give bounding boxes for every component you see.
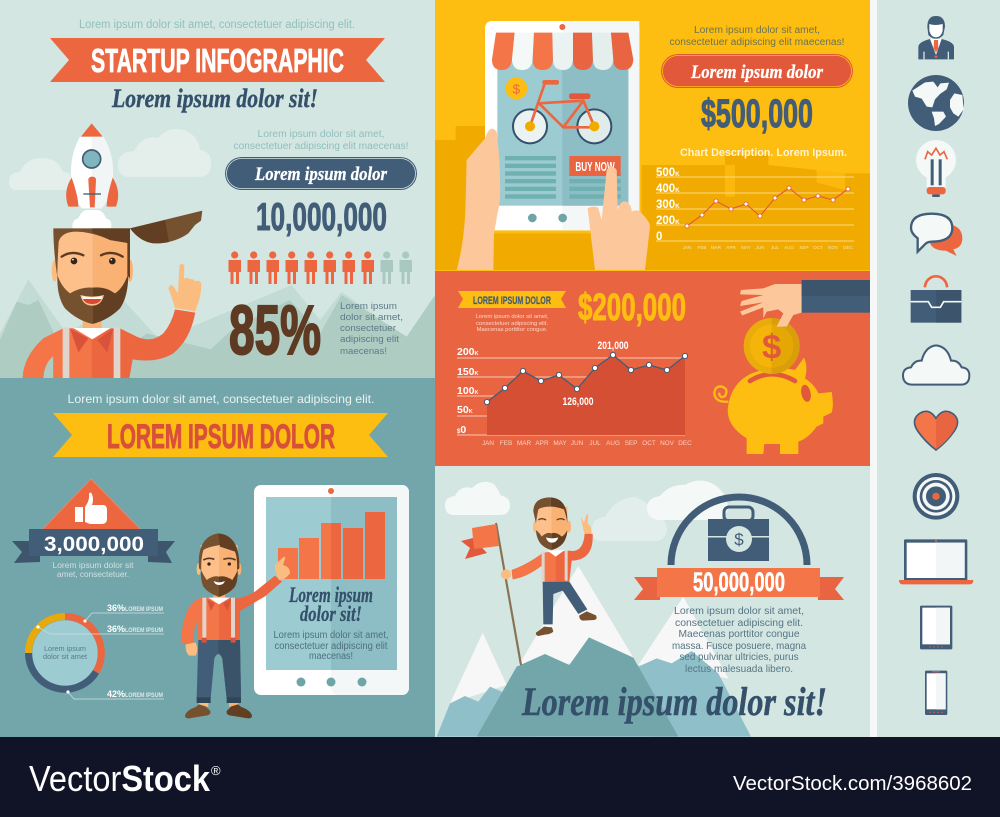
area chart: AUG <box>606 440 620 447</box>
panel: lorem ipsum dolor teal <box>0 378 435 737</box>
area chart: DEC <box>678 440 692 447</box>
ribbon description <box>476 314 549 333</box>
script heading: Lorem ipsum dolor sit! <box>521 679 827 724</box>
line chart: yellow panel: APR <box>726 245 736 250</box>
paragraph: consectetuer adipiscing elit. <box>675 618 803 629</box>
icon: heart <box>914 411 958 450</box>
ribbon description: consectetuer adipiscing elit. <box>476 321 548 327</box>
footer bar <box>0 737 1000 817</box>
area chart: JUN <box>571 440 584 447</box>
area chart: 100K <box>457 385 479 397</box>
small ribbon: LOREM IPSUM DOLOR <box>473 295 551 307</box>
coin <box>505 77 527 99</box>
mountains background <box>0 279 435 378</box>
title ribbon: STARTUP INFOGRAPHIC <box>91 42 344 79</box>
donut chart: dolor sit amet <box>43 652 87 661</box>
yellow ribbon heading: LOREM IPSUM DOLOR <box>107 418 335 456</box>
character: man on the summit <box>501 497 597 636</box>
line chart: yellow panel: SEP <box>799 245 809 250</box>
line chart: yellow panel: OCT <box>813 245 823 250</box>
small ribbon <box>458 291 566 308</box>
intro text <box>670 25 844 48</box>
area chart: OCT <box>642 440 656 447</box>
left hand <box>457 129 500 270</box>
stat description: Lorem ipsum <box>340 301 397 312</box>
awning <box>492 33 633 70</box>
script heading: Lorem ipsum dolor sit! <box>111 84 318 113</box>
caption <box>52 560 134 579</box>
icon: briefcase in arch: $ <box>734 530 744 549</box>
ribbon description: Maecenas porttitor congue. <box>476 327 548 333</box>
ribbon description: Lorem ipsum dolor sit amet, <box>476 314 549 320</box>
paragraph: Lorem ipsum dolor sit amet, <box>674 606 804 617</box>
area chart: APR <box>535 440 549 447</box>
line chart: yellow panel: FEB <box>698 245 706 250</box>
area chart: FEB <box>500 440 512 447</box>
line chart: yellow panel: 300K <box>656 199 680 211</box>
panel: summit light <box>435 466 870 737</box>
icon: rocket <box>66 123 118 228</box>
donut callouts: 36% <box>107 603 126 614</box>
caption: amet, consectetuer. <box>57 569 129 579</box>
area chart: NOV <box>660 440 675 447</box>
line chart: yellow panel: MAR <box>711 245 722 250</box>
character: bearded man with open head <box>23 211 202 378</box>
mountains <box>437 566 751 737</box>
tablet with bar chart: maecenas! <box>309 651 353 662</box>
donut chart <box>28 616 101 689</box>
intro text: Lorem ipsum dolor sit amet, <box>694 25 820 36</box>
line chart: yellow panel: JAN <box>683 245 691 250</box>
banner: 3,000,000 <box>12 529 175 563</box>
subtitle: Lorem ipsum dolor sit amet, consectetuer adipiscing elit. <box>68 393 374 406</box>
panel: icon column <box>877 0 1000 737</box>
line chart: yellow panel: 0 <box>656 231 662 243</box>
line chart: yellow panel: DEC <box>843 245 854 250</box>
stat description: consectetuer <box>340 323 397 334</box>
icon: cloud <box>903 345 969 385</box>
yellow ribbon heading <box>53 413 388 457</box>
stat description: maecenas! <box>340 346 387 357</box>
stat: 85 percent: 85% <box>229 291 321 369</box>
donut callouts: 36% <box>107 624 126 635</box>
bar chart <box>278 512 385 579</box>
big number: $200,000 <box>578 287 686 329</box>
donut chart: Lorem ipsum <box>44 644 86 653</box>
thumbs up triangle badge <box>42 479 141 530</box>
big number: 10,000,000 <box>256 196 387 239</box>
panel: savings orange <box>435 271 870 466</box>
line chart: yellow panel: JUN <box>756 245 764 250</box>
pill heading <box>225 157 417 190</box>
clouds <box>445 480 728 541</box>
flag on pole <box>461 523 521 665</box>
paragraph: Maecenas porttitor congue <box>678 629 800 640</box>
line chart: yellow panel: 500K <box>656 167 680 179</box>
pill heading: Lorem ipsum dolor <box>254 164 388 185</box>
registered mark: ® <box>211 763 221 778</box>
banner: 3,000,000: 3,000,000 <box>44 533 144 556</box>
line chart: yellow panel: JUL <box>771 245 780 250</box>
line chart: yellow panel <box>656 167 854 250</box>
icon: briefcase in arch <box>671 497 807 565</box>
paragraph: massa. Fusce posuere, magna <box>672 641 806 652</box>
stat description: dolor sit amet, <box>340 312 403 323</box>
chart title: Chart Description. Lorem Ipsum. <box>680 147 847 159</box>
line chart: yellow panel: 400K <box>656 183 680 195</box>
icon: light bulb <box>916 140 956 197</box>
icon: smartphone <box>925 671 947 715</box>
area chart: 126,000 <box>562 396 594 408</box>
text above pill <box>234 129 408 152</box>
subtitle: Lorem ipsum dolor sit amet, consectetuer adipiscing elit. <box>79 19 355 31</box>
buy now button: BUY NOW <box>575 160 615 174</box>
tablet with bar chart: Lorem ipsum dolor sit amet, <box>274 630 388 641</box>
area chart: MAR <box>517 440 531 447</box>
area chart: 200K <box>457 346 479 358</box>
line chart: yellow panel: AUG <box>784 245 794 250</box>
donut callouts: LOREM IPSUM <box>125 693 163 699</box>
area chart: MAY <box>553 440 567 447</box>
gold coin <box>744 318 800 374</box>
bicycle <box>513 80 611 143</box>
right hand <box>588 167 650 270</box>
panel: online store yellow <box>435 0 870 271</box>
line chart: yellow panel: NOV <box>828 245 839 250</box>
area chart: 201,000 <box>598 340 628 352</box>
stat description <box>340 301 403 357</box>
donut callouts <box>36 603 164 700</box>
stat description: adipiscing elit <box>340 334 399 345</box>
icon: laptop <box>899 539 973 584</box>
tablet with bar chart: dolor sit! <box>300 601 362 626</box>
product text lines <box>505 156 621 199</box>
title ribbon <box>50 38 385 82</box>
pill heading: Lorem ipsum dolor <box>690 62 824 83</box>
tablet with bar chart: Lorem ipsum <box>288 582 373 607</box>
illustration: tablet storefront with bicycle <box>457 21 650 270</box>
paragraph: lectus malesuada libero. <box>685 664 793 675</box>
area chart: $0 <box>457 424 466 436</box>
paragraph: sed pulvinar ultricies, purus <box>680 652 798 663</box>
character: presenting man <box>181 533 290 718</box>
icon: tablet <box>920 606 952 649</box>
donut callouts: LOREM IPSUM <box>125 628 163 634</box>
text above pill: Lorem ipsum dolor sit amet, <box>258 129 384 140</box>
icon: briefcase <box>911 276 961 323</box>
banner: 50,000,000: 50,000,000 <box>693 567 785 597</box>
line chart: yellow panel: 200K <box>656 215 680 227</box>
illustration: tablet storefront with bicycle: $ <box>513 81 521 96</box>
piggy bank <box>714 358 833 454</box>
icon: businessman <box>918 16 954 59</box>
intro text: consectetuer adipiscing elit maecenas! <box>670 37 844 48</box>
tablet with bar chart <box>254 485 409 695</box>
hand <box>740 284 802 327</box>
area chart <box>457 340 692 447</box>
illustration: piggy bank, coin and hand <box>714 280 870 454</box>
caption: Lorem ipsum dolor sit <box>52 560 134 570</box>
icon: speech bubbles <box>911 214 962 256</box>
tablet with bar chart: consectetuer adipiscing elit <box>274 641 388 652</box>
gold coin: $ <box>762 328 781 366</box>
area chart: SEP <box>625 440 637 447</box>
divider strip <box>870 0 877 737</box>
buy now button <box>569 156 621 176</box>
watermark logo: VectorStock <box>29 758 211 799</box>
line chart: yellow panel: MAY <box>741 245 751 250</box>
clouds <box>9 129 211 190</box>
area chart: 50K <box>457 404 473 416</box>
pill heading <box>661 54 853 88</box>
paragraph <box>672 606 806 675</box>
text above pill: consectetuer adipiscing elit maecenas! <box>234 141 408 152</box>
icon: globe <box>908 75 964 131</box>
city silhouette <box>435 126 870 270</box>
banner: 50,000,000 <box>634 567 844 600</box>
area chart: JUL <box>589 440 601 447</box>
sleeve <box>802 280 870 313</box>
panel: startup intro <box>0 0 435 378</box>
pictogram: ten people, eight highlighted <box>228 251 412 284</box>
icon: target <box>913 473 959 520</box>
big number: $500,000 <box>701 92 813 136</box>
image id: VectorStock.com/3968602 <box>733 773 972 795</box>
area chart: 150K <box>457 366 479 378</box>
donut callouts: 42% <box>107 689 126 700</box>
donut callouts: LOREM IPSUM <box>125 607 163 613</box>
area chart: JAN <box>482 440 494 447</box>
